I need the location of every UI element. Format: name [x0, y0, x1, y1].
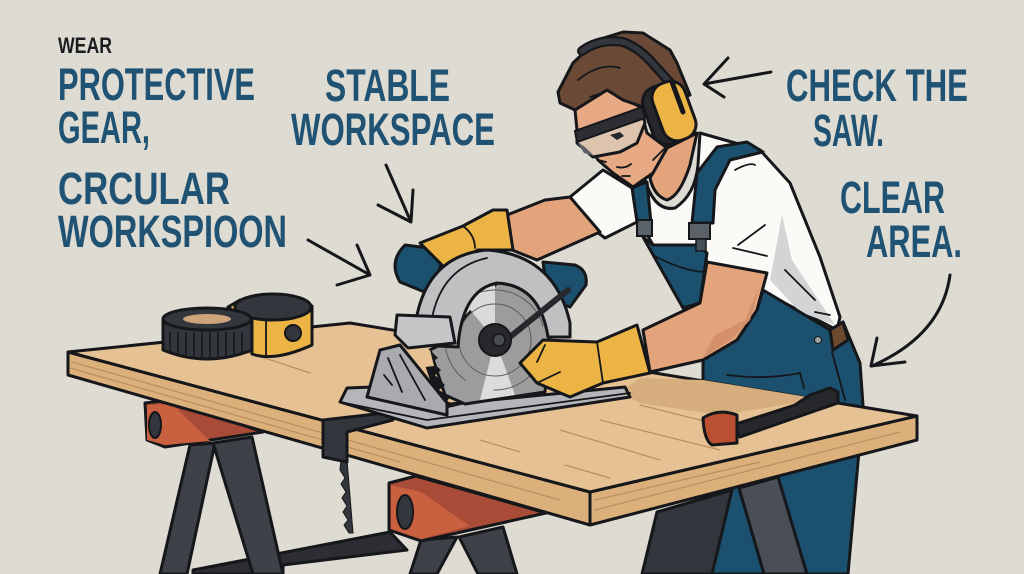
- left strap: [632, 182, 651, 223]
- table front-left edge: [68, 352, 590, 525]
- saw bracket: [367, 345, 447, 415]
- left arm and glove: [420, 170, 637, 268]
- heading: stable workspace: [291, 60, 495, 155]
- hair: [558, 32, 690, 110]
- strap buckles: [637, 220, 710, 251]
- face: [575, 88, 667, 187]
- right sawhorse: [389, 476, 546, 574]
- belt: [830, 322, 848, 350]
- workbench table: [68, 323, 917, 525]
- left sawhorse: [145, 400, 407, 574]
- black tape measure: [163, 308, 252, 359]
- heading: stable workspace: WORKSPACE: [291, 104, 495, 155]
- far sawhorse legs: [642, 477, 807, 574]
- heading: wear protective gear: PROTECTIVE: [58, 59, 255, 110]
- heading: wear protective gear: WEAR: [58, 33, 112, 58]
- heading: circular workspace: WORKSPIOON: [58, 206, 287, 257]
- serrated blade below table: [340, 460, 353, 533]
- yellow tape roll: [228, 294, 312, 357]
- arrow: to ear protection: [704, 58, 771, 97]
- heading: clear area: [840, 172, 962, 267]
- heading: wear protective gear: GEAR,: [58, 102, 150, 153]
- overall bib and waist: [643, 237, 707, 308]
- head: [558, 32, 700, 187]
- heading: stable workspace: STABLE: [325, 60, 450, 111]
- ear muff: [638, 77, 700, 149]
- neck: [650, 133, 697, 200]
- table front-right edge: [590, 416, 917, 525]
- worker legs: [705, 440, 860, 574]
- saw base plate: [340, 387, 630, 428]
- heading: clear area: AREA.: [866, 216, 962, 267]
- table clamp: [323, 412, 393, 462]
- right strap: [692, 142, 763, 223]
- heading: circular workspace: CRCULAR: [58, 163, 230, 214]
- arrow: to clear area: [871, 275, 950, 366]
- table top: [68, 323, 917, 492]
- arrow: to saw handle: [308, 240, 370, 285]
- hand tool: [703, 388, 838, 445]
- goggles: [575, 107, 645, 157]
- headband: [582, 41, 683, 110]
- saw blade: [412, 283, 550, 410]
- worker torso and overalls: [632, 133, 863, 440]
- saw front foot: [395, 315, 455, 348]
- heading: clear area: CLEAR: [840, 172, 945, 223]
- heading: check the saw: [786, 60, 968, 156]
- saw blade guard: [417, 250, 570, 347]
- saw arbor and lever: [479, 290, 568, 356]
- left sleeve: [570, 170, 637, 238]
- saw motor housing: [395, 245, 586, 307]
- right arm and glove: [520, 262, 767, 397]
- t-shirt: [632, 133, 840, 330]
- arrow: to stable workspace: [378, 165, 413, 222]
- heading: circular workspace: [58, 163, 287, 257]
- heading: check the saw: SAW.: [813, 105, 884, 156]
- heading: wear protective gear: [58, 33, 255, 153]
